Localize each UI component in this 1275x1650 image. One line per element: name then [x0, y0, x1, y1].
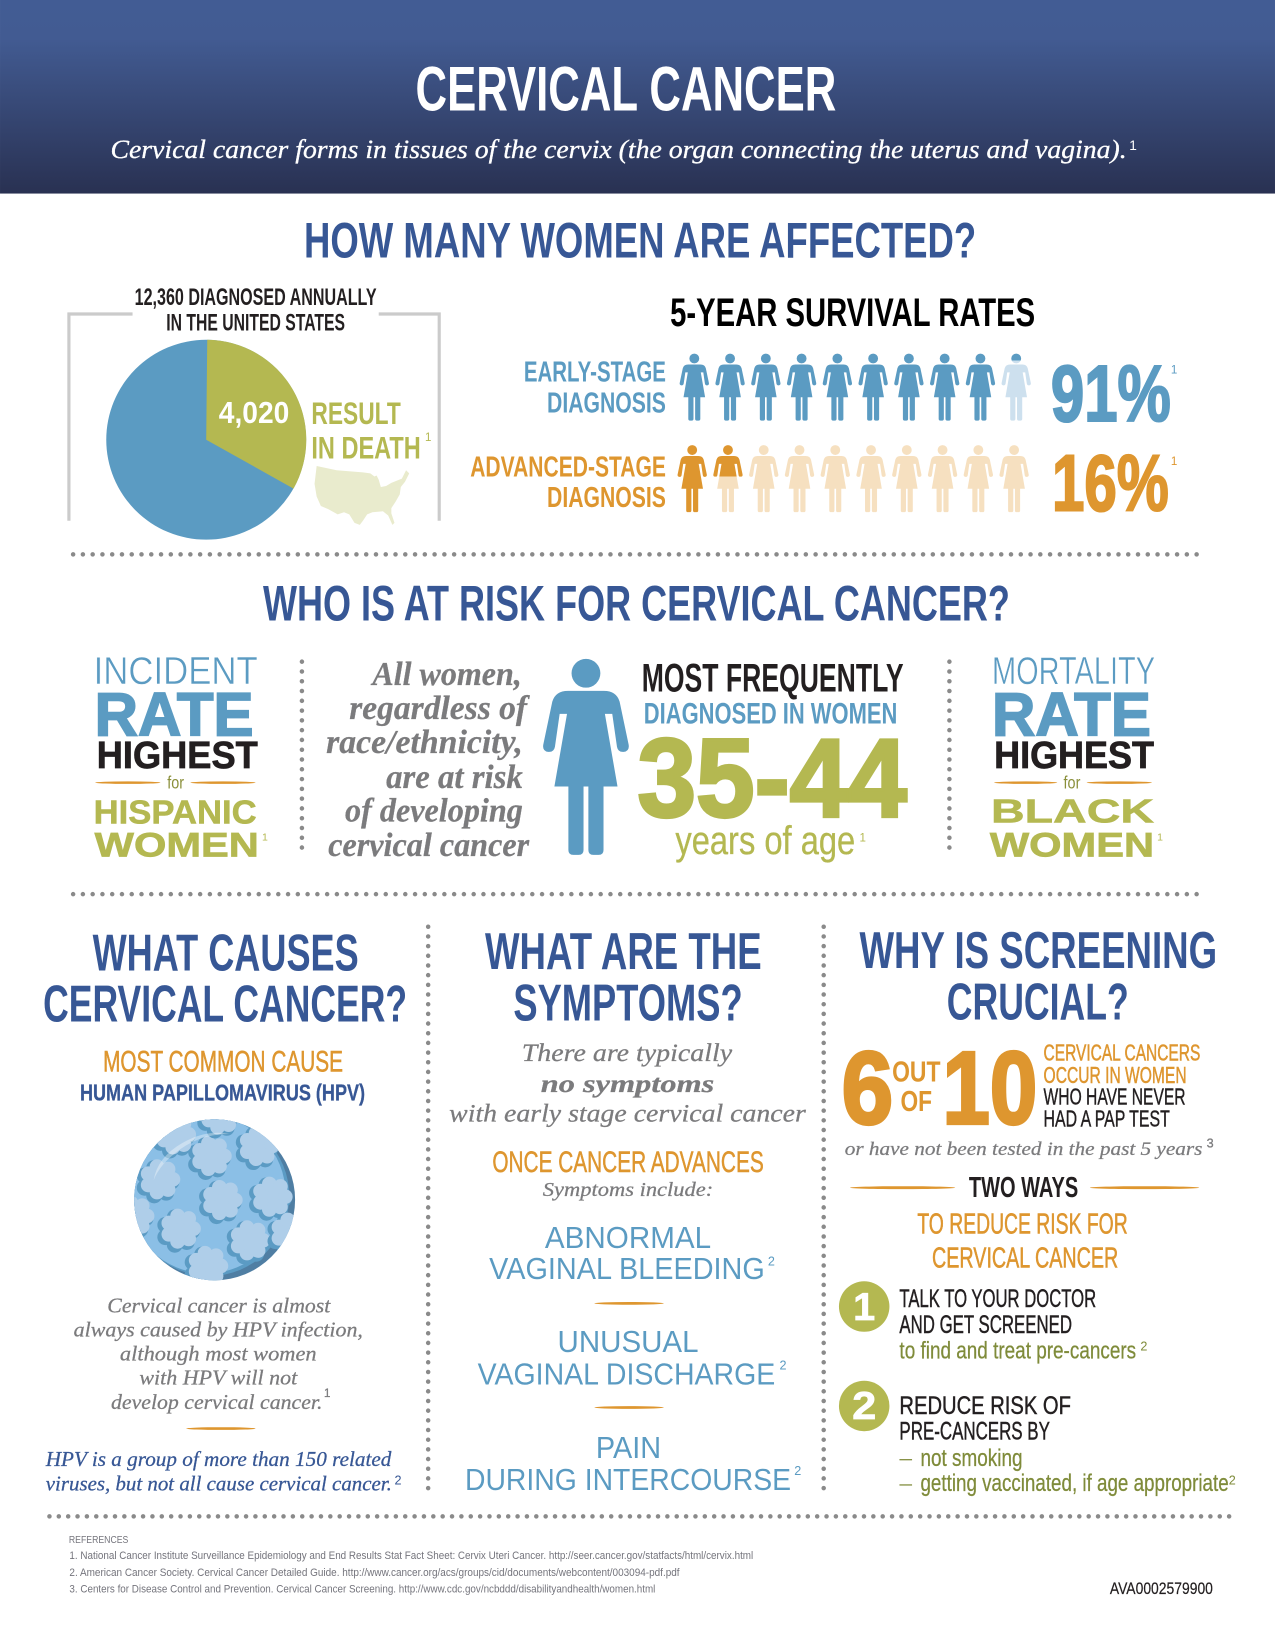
- panel: incident rate: RATE: [95, 680, 254, 748]
- references: 3. Centers for Disease Control and Prevention. Cervical Cancer Screening. http://www.cdc.gov/ncbddd/disabilityandhealth/women.html: [69, 1584, 655, 1596]
- text block: HPV explanation: [74, 1293, 363, 1414]
- label: advanced-stage diagnosis: [470, 452, 666, 514]
- step 2: reduce risk of pre-cancers: PRE-CANCERS BY: [899, 1418, 1050, 1446]
- panel: most frequently diagnosed age: [638, 657, 907, 863]
- caption: diagnosed annually: [135, 284, 377, 336]
- references: [69, 1534, 753, 1596]
- text block: cervical cancers occur: WHO HAVE NEVER: [1044, 1084, 1186, 1110]
- panel: most frequently diagnosed age: 35-44: [638, 715, 907, 840]
- symptom: unusual vaginal discharge: [478, 1325, 787, 1391]
- heading: screening: CRUCIAL?: [947, 972, 1129, 1030]
- references: 2. American Cancer Society. Cervical Cancer Detailed Guide. http://www.cancer.org/acs/groups/cid/documents/webcontent/003094-pdf.pdf: [69, 1567, 680, 1579]
- heading: what causes: [43, 923, 407, 1032]
- pictogram: early-stage women: [680, 354, 1031, 421]
- heading: what causes: CERVICAL CANCER?: [43, 974, 407, 1032]
- text block: HPV explanation: Cervical cancer is almost: [107, 1293, 332, 1317]
- heading: symptoms: SYMPTOMS?: [513, 973, 743, 1031]
- panel: incident rate: for: [167, 772, 184, 792]
- step 1: talk to your doctor: to find and treat pre-cancers: [899, 1338, 1136, 1365]
- panel: diagnosed annually pie chart: [69, 284, 439, 540]
- panel: incident rate: [94, 650, 268, 864]
- document code: AVA0002579900: [1110, 1579, 1213, 1598]
- stat: 16 percent: 16%: [1052, 439, 1169, 528]
- panel: mortality rate: for: [1064, 772, 1080, 792]
- stat: 16 percent: 1: [1171, 456, 1177, 468]
- panel: 5-year survival rates: [470, 291, 1177, 528]
- bracket frame: [69, 314, 439, 521]
- text block: HPV group note: [45, 1447, 402, 1496]
- stat: 6 out of 10: 6: [842, 1030, 893, 1145]
- subheading: once cancer advances: ONCE CANCER ADVANCES: [492, 1146, 764, 1179]
- heading: two ways: CERVICAL CANCER: [932, 1243, 1118, 1275]
- step 2: reduce risk of pre-cancers: REDUCE RISK OF: [899, 1392, 1071, 1420]
- subheading: once cancer advances: Symptoms include:: [543, 1179, 713, 1201]
- label: result in death: [311, 395, 431, 466]
- pie chart: [106, 340, 306, 540]
- heading: symptoms: [485, 922, 762, 1031]
- panel: most frequently diagnosed age: DIAGNOSED IN WOMEN: [644, 698, 897, 731]
- text block: cervical cancers occur: CERVICAL CANCERS: [1044, 1039, 1200, 1065]
- stat: 6 out of 10: 10: [943, 1030, 1037, 1145]
- panel: incident rate: HISPANIC: [94, 795, 257, 832]
- panel: what causes cervical cancer: [43, 923, 407, 1496]
- caption: diagnosed annually: 12,360 DIAGNOSED ANNUALLY: [135, 284, 377, 311]
- panel: mortality rate: [990, 650, 1163, 864]
- text block: no symptoms early: [449, 1040, 806, 1127]
- stat: 91 percent: 1: [1171, 364, 1177, 376]
- step 1: talk to your doctor: 2: [1140, 1340, 1147, 1354]
- text block: all women at risk: of developing: [345, 793, 523, 830]
- text block: not been tested: 3: [1207, 1137, 1214, 1151]
- panel: mortality rate: BLACK: [991, 794, 1154, 831]
- references: REFERENCES: [69, 1534, 128, 1546]
- subheading: most common cause: MOST COMMON CAUSE: [103, 1045, 343, 1078]
- symptom: pain during intercourse: 2: [794, 1464, 801, 1478]
- stat: 6 out of 10: OUT: [892, 1056, 941, 1088]
- pie chart: 4,020: [219, 396, 289, 430]
- title: CERVICAL CANCER: [416, 54, 836, 124]
- step 2: reduce risk of pre-cancers: [839, 1381, 1236, 1497]
- label: advanced-stage diagnosis: ADVANCED-STAGE: [470, 452, 666, 484]
- step 1: talk to your doctor: [839, 1281, 1147, 1365]
- heading: two ways: TWO WAYS: [969, 1172, 1078, 1204]
- symptom: abnormal vaginal bleeding: ABNORMAL: [545, 1221, 711, 1255]
- symptom: abnormal vaginal bleeding: VAGINAL BLEEDING: [489, 1252, 765, 1286]
- text block: cervical cancers occur: HAD A PAP TEST: [1044, 1106, 1170, 1132]
- panel: most frequently diagnosed age: years of age: [675, 819, 855, 863]
- subtitle: 1: [1129, 138, 1137, 153]
- icon: map of United States: [315, 466, 409, 525]
- caption: diagnosed annually: IN THE UNITED STATES: [166, 309, 345, 336]
- heading: two ways: TO REDUCE RISK FOR: [917, 1208, 1128, 1240]
- heading: two ways: [850, 1172, 1199, 1275]
- pictogram: advanced-stage women: [678, 445, 1029, 512]
- subtitle: Cervical cancer forms in tissues of the cervix (the organ connecting the uterus and vagina).: [110, 135, 1127, 164]
- step 1: talk to your doctor: 1: [853, 1286, 875, 1329]
- panel: incident rate: INCIDENT: [94, 650, 258, 693]
- label: result in death: RESULT: [311, 395, 401, 431]
- text block: cervical cancers occur: OCCUR IN WOMEN: [1044, 1062, 1187, 1088]
- stat: 6 out of 10: [842, 1030, 1037, 1145]
- text block: not been tested: or have not been tested in the past 5 years: [845, 1139, 1202, 1160]
- heading: what causes: WHAT CAUSES: [93, 923, 359, 981]
- symptom: abnormal vaginal bleeding: 2: [768, 1255, 775, 1269]
- text block: all women at risk: are at risk: [386, 759, 523, 796]
- stat: 91 percent: 91%: [1051, 349, 1171, 438]
- references: 1. National Cancer Institute Surveillance Epidemiology and End Results Stat Fact Sheet: Cervix Uteri Cancer. http://seer.cancer.gov/statfacts/html/cervix.html: [69, 1550, 753, 1562]
- text block: all women at risk: regardless of: [349, 690, 530, 727]
- panel: incident rate: 1: [262, 832, 268, 844]
- panel: incident rate: HIGHEST: [97, 735, 258, 777]
- symptom: unusual vaginal discharge: 2: [780, 1359, 787, 1373]
- icon: woman figure: [543, 659, 629, 855]
- text block: all women at risk: All women,: [371, 656, 522, 693]
- text block: HPV explanation: with HPV will not: [139, 1365, 298, 1389]
- symptom: unusual vaginal discharge: VAGINAL DISCHARGE: [478, 1357, 775, 1391]
- subheading: HPV: HUMAN PAPILLOMAVIRUS (HPV): [80, 1079, 365, 1105]
- label: early-stage diagnosis: [524, 356, 666, 419]
- panel: most frequently diagnosed age: MOST FREQUENTLY: [642, 657, 904, 701]
- icon: HPV virus: [134, 1119, 296, 1280]
- label: early-stage diagnosis: DIAGNOSIS: [547, 387, 666, 419]
- heading: screening: [859, 921, 1217, 1030]
- panel: mortality rate: HIGHEST: [994, 735, 1154, 777]
- symptom: pain during intercourse: PAIN: [596, 1431, 661, 1465]
- panel: mortality rate: MORTALITY: [992, 650, 1155, 693]
- panel: why screening is crucial: [839, 921, 1236, 1497]
- text block: HPV explanation: 1: [324, 1388, 330, 1400]
- panel: mortality rate: 1: [1157, 832, 1163, 844]
- text block: HPV group note: viruses, but not all cause cervical cancer.: [46, 1472, 392, 1496]
- text block: no symptoms early: with early stage cervical cancer: [449, 1100, 806, 1127]
- text block: no symptoms early: There are typically: [522, 1040, 733, 1067]
- text block: HPV group note: 2: [394, 1473, 402, 1487]
- text block: all women at risk: cervical cancer: [328, 827, 530, 864]
- symptom: unusual vaginal discharge: UNUSUAL: [558, 1325, 699, 1359]
- step 2: reduce risk of pre-cancers: not smoking: [920, 1445, 1023, 1472]
- panel: mortality rate: WOMEN: [990, 826, 1154, 864]
- label: result in death: 1: [425, 432, 431, 444]
- header banner: [0, 0, 1275, 194]
- heading: survival rates: 5-YEAR SURVIVAL RATES: [670, 291, 1035, 335]
- label: result in death: IN DEATH: [311, 430, 421, 466]
- panel: mortality rate: RATE: [992, 680, 1151, 748]
- subheading: once cancer advances: [492, 1146, 764, 1201]
- text block: all women at risk: [326, 656, 530, 864]
- text block: HPV explanation: always caused by HPV infection,: [74, 1318, 363, 1342]
- heading: symptoms: WHAT ARE THE: [485, 922, 762, 980]
- symptom: pain during intercourse: DURING INTERCOURSE: [465, 1463, 791, 1497]
- symptom: abnormal vaginal bleeding: [489, 1221, 775, 1286]
- text block: HPV explanation: although most women: [120, 1342, 317, 1366]
- panel: most frequently diagnosed age: 1: [859, 833, 866, 845]
- step 1: talk to your doctor: AND GET SCREENED: [899, 1311, 1072, 1339]
- heading: how many women are affected: HOW MANY WOMEN ARE AFFECTED?: [304, 212, 976, 269]
- step 2: reduce risk of pre-cancers: 2: [1229, 1473, 1236, 1487]
- step 2: reduce risk of pre-cancers: 2: [852, 1385, 876, 1428]
- stat: 6 out of 10: OF: [900, 1086, 932, 1118]
- text block: HPV group note: HPV is a group of more than 150 related: [45, 1447, 392, 1471]
- symptom: pain during intercourse: [465, 1431, 801, 1497]
- label: advanced-stage diagnosis: DIAGNOSIS: [547, 482, 666, 514]
- step 1: talk to your doctor: TALK TO YOUR DOCTOR: [899, 1285, 1096, 1313]
- label: early-stage diagnosis: EARLY-STAGE: [524, 356, 666, 388]
- panel: symptoms: [449, 922, 806, 1497]
- text block: HPV explanation: develop cervical cancer.: [111, 1390, 322, 1414]
- panel: incident rate: WOMEN: [95, 826, 259, 864]
- text block: cervical cancers occur: [1044, 1039, 1200, 1132]
- text block: no symptoms early: no symptoms: [541, 1071, 715, 1098]
- text block: all women at risk: race/ethnicity,: [326, 724, 523, 761]
